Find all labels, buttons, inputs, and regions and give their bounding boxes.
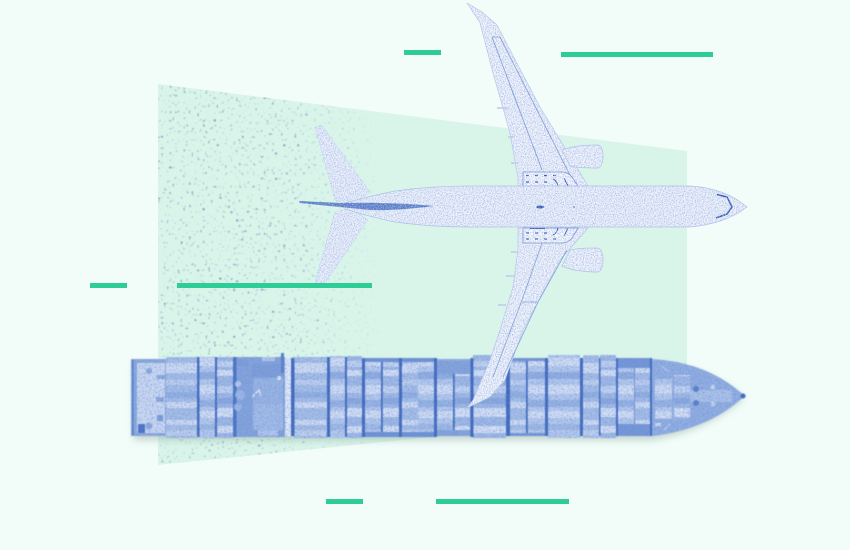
bar: bottom short (326, 499, 363, 504)
fuselage markings (536, 206, 575, 208)
airplane (299, 3, 747, 408)
stern deck (131, 359, 166, 436)
fuselage (345, 186, 747, 227)
infographic canvas (90, 2, 748, 504)
lower flap box (523, 228, 578, 243)
upper engine (562, 145, 603, 168)
lower engine (562, 248, 603, 272)
upper flap box (523, 172, 578, 186)
upper wing (467, 3, 588, 186)
bar: middle long (177, 283, 372, 288)
label placeholder bars (90, 50, 713, 504)
tail stabilizers (314, 126, 370, 286)
dark bay separators (197, 357, 652, 437)
bow deck (655, 366, 746, 430)
tail fin (299, 201, 434, 210)
superstructure (233, 353, 291, 437)
ship hull (131, 359, 746, 436)
bar: top short (404, 50, 441, 55)
bar: top long (561, 52, 713, 57)
bar: bottom long (436, 499, 569, 504)
cockpit windshield (716, 194, 732, 218)
green perspective panel (158, 84, 687, 465)
ship shadow (134, 364, 744, 440)
speckle texture on panel (158, 84, 388, 466)
bar: middle short (90, 283, 127, 288)
lower wing (467, 228, 588, 408)
container ship (131, 353, 746, 438)
container bays (166, 355, 690, 438)
